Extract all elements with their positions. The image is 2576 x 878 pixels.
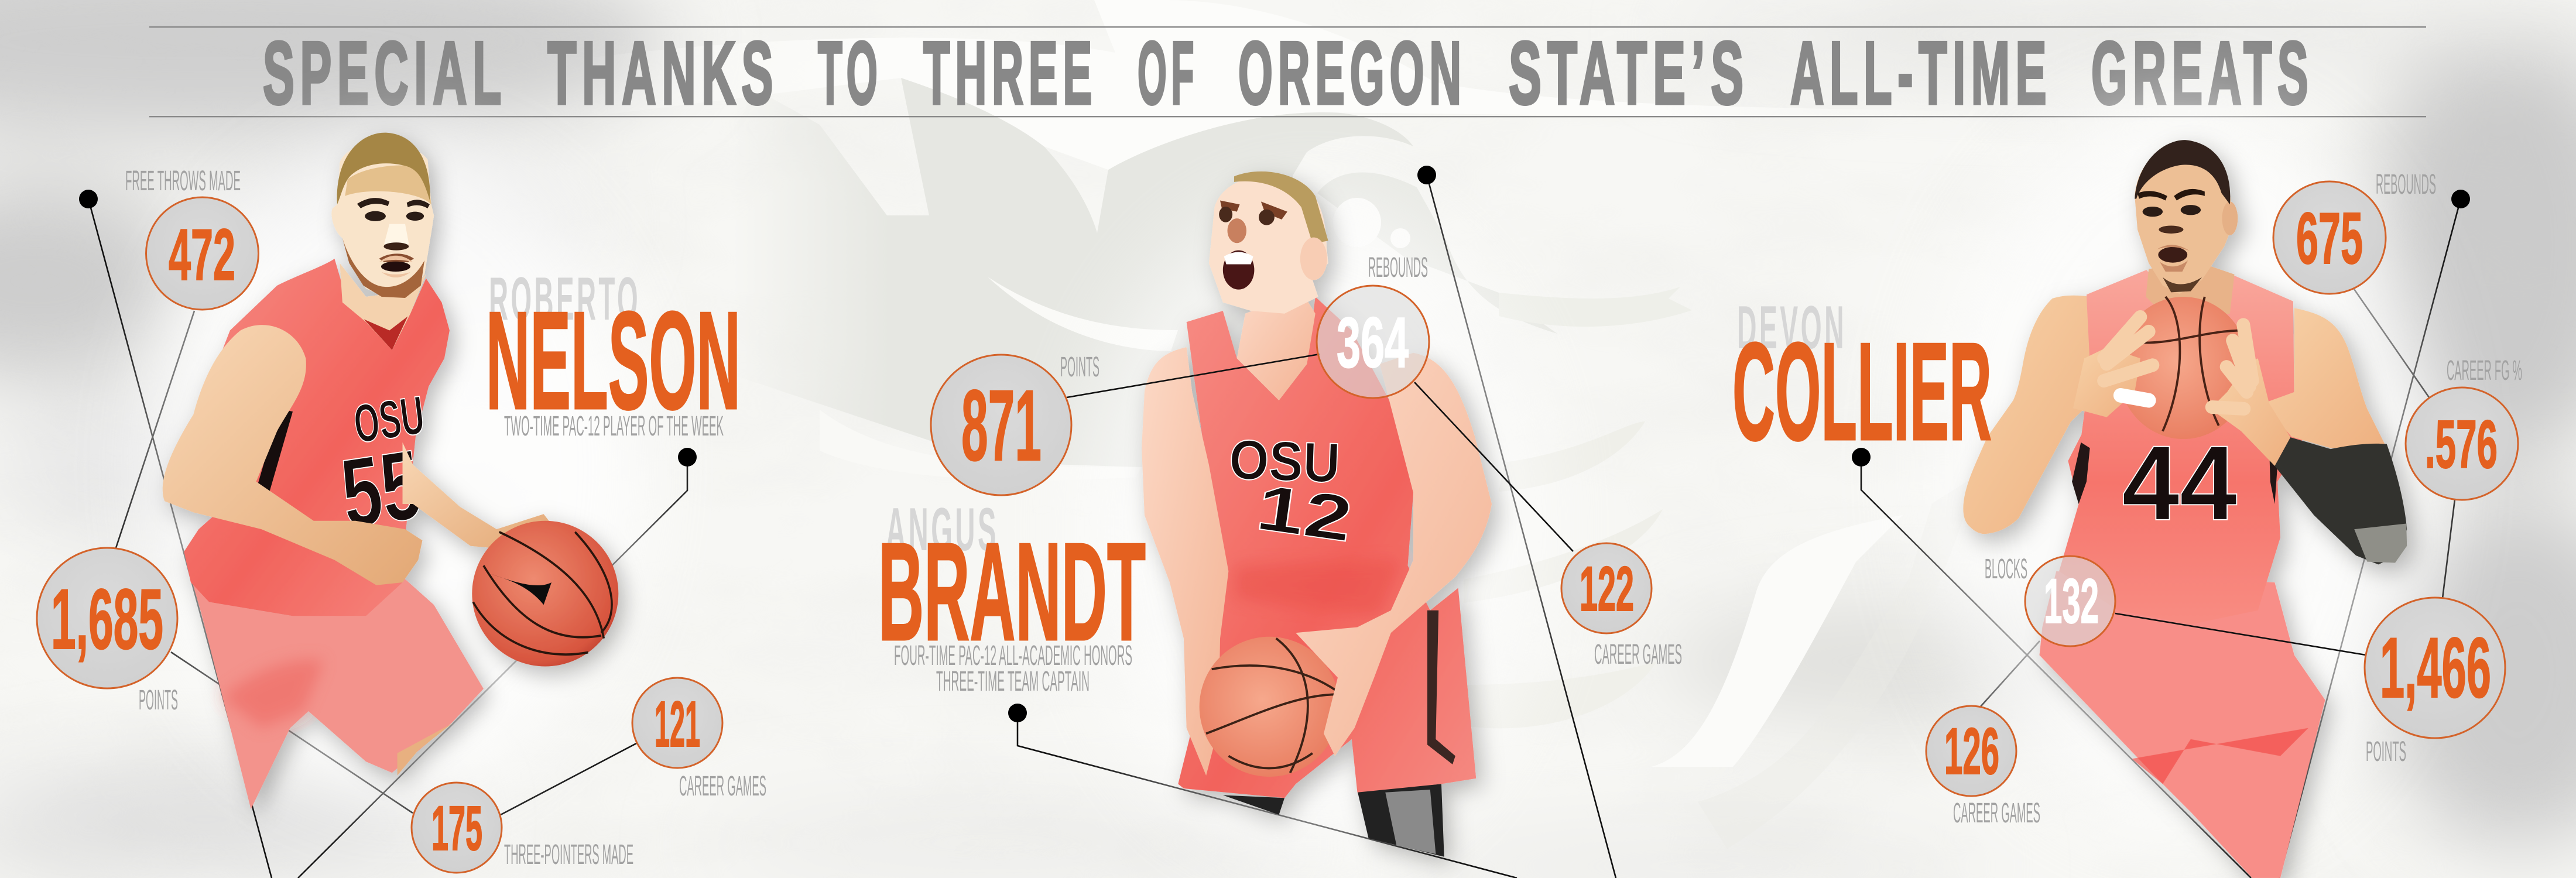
stat: career field goal percentage xyxy=(2406,355,2522,500)
player figure: Brandt xyxy=(1142,172,1492,857)
title rule top xyxy=(149,26,2426,28)
stat: career games: 126 xyxy=(1944,715,1999,788)
leader lines behind player xyxy=(1018,175,1616,878)
honour text xyxy=(894,640,1132,697)
player figure: Brandt: 12 xyxy=(1252,471,1356,555)
leader lines behind player xyxy=(1861,199,2461,878)
leader dots xyxy=(79,190,697,467)
stat: points xyxy=(2365,598,2505,767)
halo behind player xyxy=(1926,105,2430,831)
stat: career games xyxy=(632,678,766,802)
stat: points xyxy=(37,548,178,716)
stat: career games xyxy=(1561,543,1682,670)
stat: career games: 121 xyxy=(655,688,700,760)
panel: Angus Brandt: POINTS xyxy=(1060,352,1099,383)
leader lines behind player xyxy=(88,199,687,878)
player figure: Nelson: 55 xyxy=(335,429,427,549)
leader dots xyxy=(1008,166,1436,722)
text: CAREER GAMES xyxy=(1594,639,1682,670)
panel: Devon Collier: REBOUNDS xyxy=(2376,169,2436,200)
text: NELSON xyxy=(486,283,741,438)
background: Oregon State beaver logo watermark xyxy=(585,0,1991,849)
leader line over player xyxy=(2115,613,2366,655)
panel: Angus Brandt: BRANDT xyxy=(878,515,1146,670)
stat: blocks: BLOCKS xyxy=(1985,554,2027,585)
panel: Devon Collier xyxy=(1732,105,2522,878)
stat: blocks xyxy=(1985,554,2115,646)
panel: Roberto Nelson: FREE THROWS MADE xyxy=(125,166,241,197)
panel: Roberto Nelson: POINTS xyxy=(139,685,178,716)
stat: rebounds: 364 xyxy=(1337,303,1409,382)
text: TWO-TIME PAC-12 PLAYER OF THE WEEK xyxy=(504,411,724,442)
title xyxy=(263,23,2314,123)
panel: Roberto Nelson: ROBERTO xyxy=(489,265,640,333)
player figure: Collier xyxy=(1963,140,2407,878)
title: GREATS xyxy=(2091,23,2314,123)
player figure: Nelson xyxy=(163,133,618,809)
stat: free throws made: 472 xyxy=(169,215,235,296)
stat: points: 1,685 xyxy=(51,571,163,667)
panel: Devon Collier: DEVON xyxy=(1737,294,1847,362)
stat: points: POINTS xyxy=(2366,736,2406,767)
title: OREGON xyxy=(1238,23,1467,123)
title: OF xyxy=(1138,23,1198,123)
stat: career field goal percentage: .576 xyxy=(2425,406,2498,482)
stat: rebounds: 675 xyxy=(2296,198,2363,279)
leader lines over player xyxy=(1067,354,1573,551)
player figure: Brandt: OSU xyxy=(1228,428,1341,495)
halo behind player xyxy=(152,140,644,796)
title: ALL-TIME xyxy=(1790,23,2052,123)
stat: points: 871 xyxy=(961,369,1042,482)
panel: Angus Brandt: ANGUS xyxy=(886,496,999,564)
stat: career games xyxy=(1926,706,2040,829)
stat: rebounds xyxy=(2273,169,2436,294)
title: THREE xyxy=(923,23,1097,123)
stat: career games: 122 xyxy=(1580,553,1634,624)
panel: Angus Brandt xyxy=(878,166,1682,878)
panel: Angus Brandt: FOUR-TIME PAC-12 ALL-ACADEMIC HONORS xyxy=(894,640,1132,671)
panel: Angus Brandt: REBOUNDS xyxy=(1368,252,1428,283)
title: STATE’S xyxy=(1509,23,1749,123)
honour text: THREE-TIME TEAM CAPTAIN xyxy=(936,666,1090,697)
halo behind player xyxy=(1077,199,1546,855)
stat: free throws made xyxy=(125,166,259,310)
panel: Roberto Nelson: THREE-POINTERS MADE xyxy=(504,839,633,870)
stat: three-pointers made xyxy=(412,783,633,873)
text: CAREER GAMES xyxy=(679,771,766,802)
stat: points xyxy=(931,352,1099,495)
panel: Devon Collier: COLLIER xyxy=(1732,314,1992,469)
title: SPECIAL xyxy=(263,23,507,123)
stat: blocks: 132 xyxy=(2044,565,2099,636)
panel: Devon Collier: CAREER GAMES xyxy=(1953,798,2040,829)
player figure: Nelson: OSU xyxy=(351,385,427,454)
title: THANKS xyxy=(547,23,779,123)
stat: three-pointers made: 175 xyxy=(431,793,482,863)
leader dots xyxy=(1852,190,2470,467)
stat: rebounds xyxy=(1317,252,1429,398)
title: TO xyxy=(818,23,882,123)
title rule bottom xyxy=(149,116,2426,117)
panel: Roberto Nelson xyxy=(37,133,766,878)
player figure: Collier: 44 xyxy=(2122,423,2237,543)
